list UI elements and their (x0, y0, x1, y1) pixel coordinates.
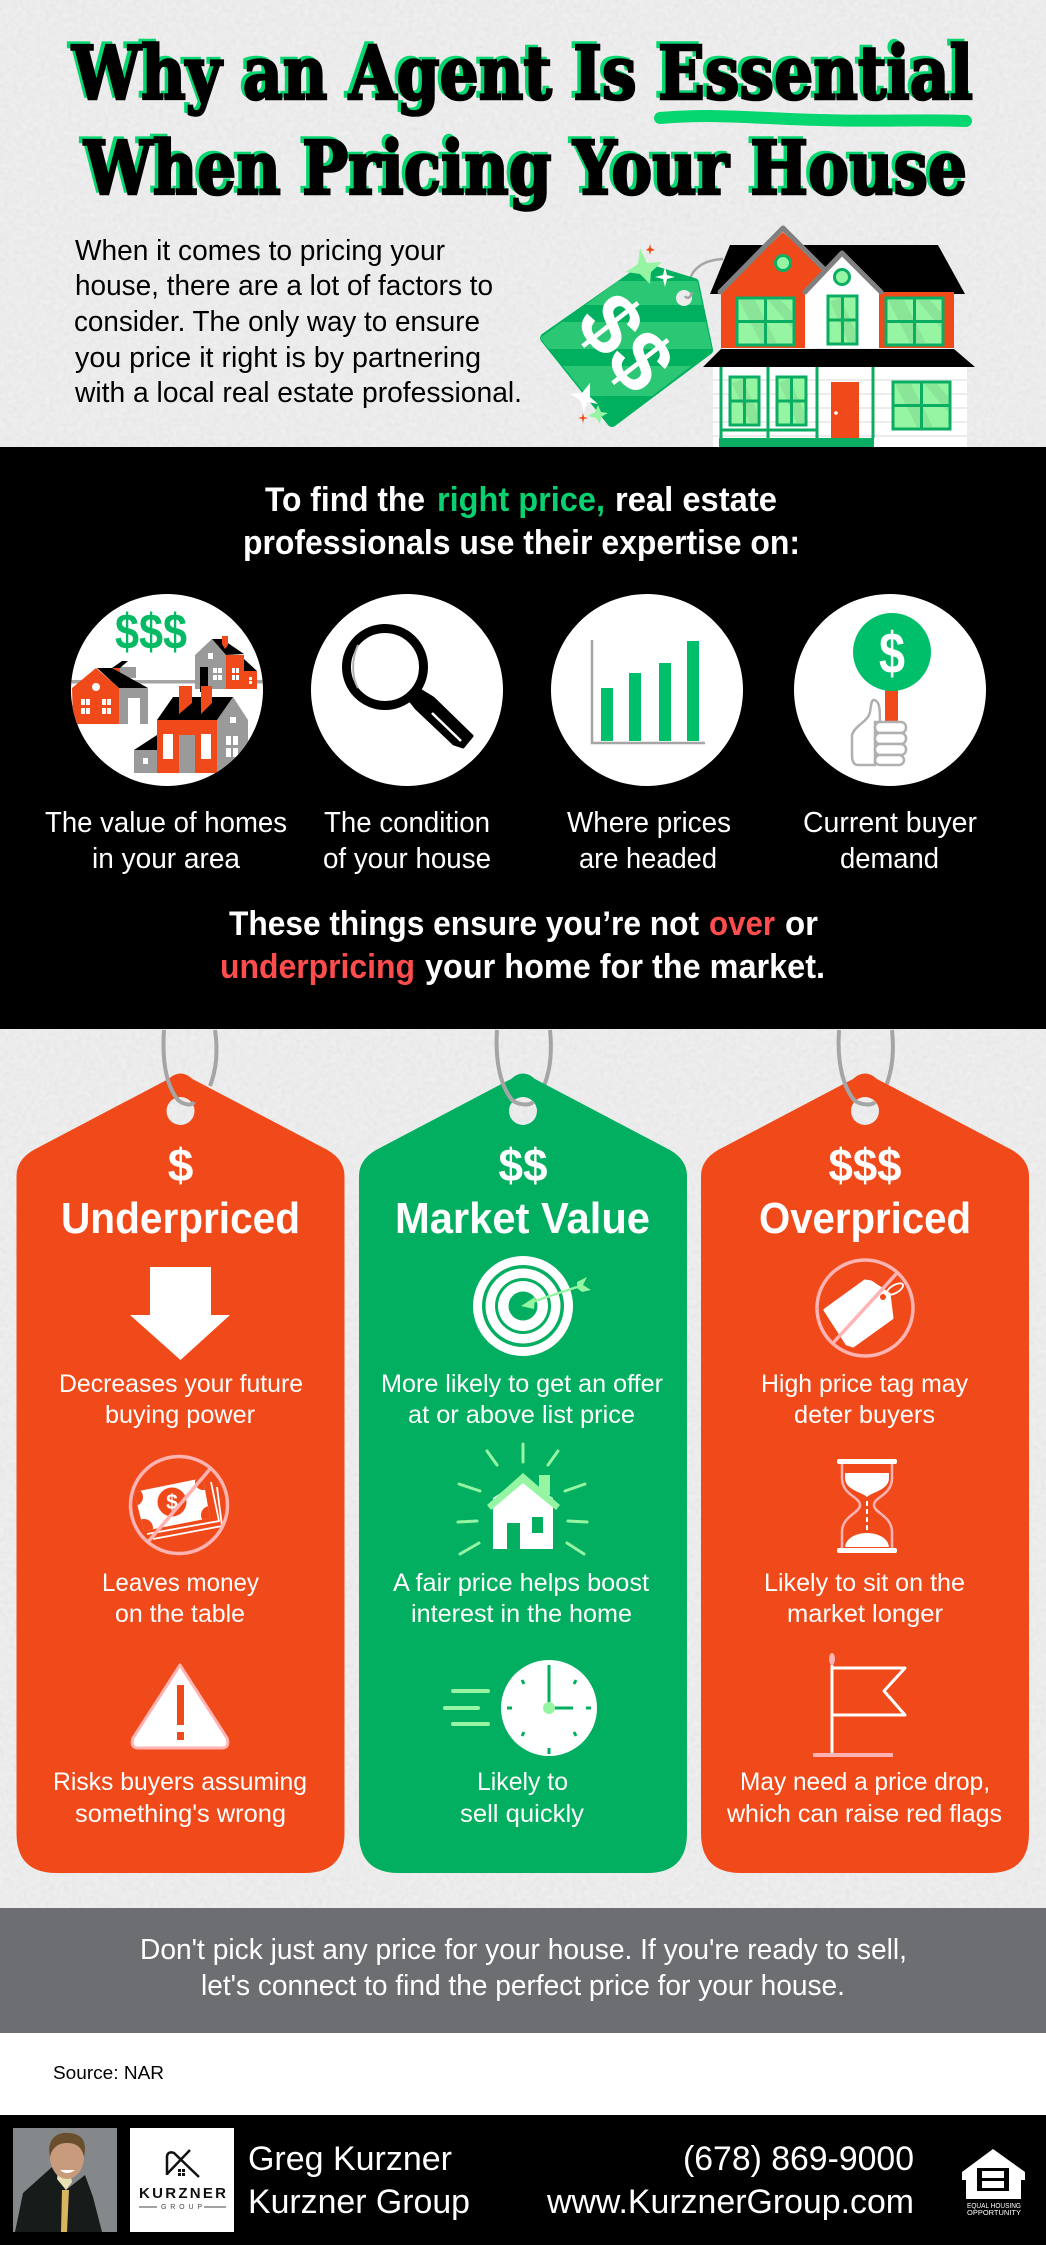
callout: over or underpricing: underpricing (220, 948, 415, 986)
title (68, 28, 973, 212)
text: price drop: May need a price drop, (740, 1768, 990, 1796)
text: future buying power: Decreases your future (59, 1370, 303, 1398)
icon: equal housing opportunity (962, 2149, 1025, 2217)
label: where prices are headed (567, 807, 731, 875)
icon: hourglass (837, 1459, 897, 1553)
text: future buying power (59, 1370, 303, 1429)
callout: over or underpricing: your home for the market. (425, 948, 825, 986)
text: price drop (726, 1768, 1002, 1828)
icon: crossed-out money: $ (166, 1491, 178, 1514)
agent name: Greg Kurzner (248, 2140, 452, 2178)
text: future buying power: buying power (105, 1401, 255, 1429)
call to action band (0, 1908, 1046, 2033)
label: condition (323, 807, 491, 875)
icon: down arrow (130, 1267, 230, 1360)
heading: right price: real estate (615, 481, 777, 519)
panel: overpriced tag (701, 1030, 1029, 1873)
call to action band: let's connect to find the perfect price for your house. (201, 1970, 845, 2002)
heading: overpriced: $$$ (828, 1139, 902, 1191)
intro paragraph: consider. The only way to ensure (74, 306, 480, 338)
intro paragraph: When it comes to pricing your (75, 235, 445, 267)
text: risks: something's wrong (75, 1800, 286, 1828)
icon: equal housing opportunity: OPPORTUNITY (967, 2210, 1021, 2217)
source note: Source: NAR (53, 2063, 164, 2083)
text: price drop: which can raise red flags (726, 1800, 1002, 1828)
icon: magnifying glass (311, 594, 503, 786)
label: value of homes (45, 807, 287, 875)
icon: crossed-out price tag (817, 1260, 913, 1356)
callout: over or underpricing (220, 905, 825, 986)
label: where prices are headed: are headed (579, 843, 717, 875)
panel: black expertise section (0, 447, 1046, 1029)
label: value of homes: in your area (92, 843, 241, 875)
icon: equal housing opportunity: EQUAL HOUSING (967, 2203, 1021, 2210)
contact details (546, 2140, 914, 2221)
intro paragraph: with a local real estate professional. (74, 377, 522, 409)
label: value of homes: The value of homes (45, 807, 287, 839)
agent photo (13, 2128, 117, 2232)
icon: warning triangle (132, 1665, 228, 1748)
intro paragraph: house, there are a lot of factors to (75, 270, 493, 302)
panel: underpriced tag (16, 1030, 344, 1873)
callout: over or underpricing: These things ensure you’re not (229, 905, 699, 943)
icon: crossed-out money (125, 1456, 228, 1554)
icon: flag (813, 1653, 905, 1757)
heading: market value: Market Value (395, 1194, 650, 1243)
call to action band: Don't pick just any price for your house. If you're ready to sell, (140, 1934, 907, 1966)
heading: right price: To find the (265, 481, 425, 519)
icon: house (703, 228, 975, 447)
text: fair price (393, 1569, 649, 1628)
text: high price tag (761, 1370, 968, 1429)
panel: market value tag (359, 1030, 687, 1873)
heading: market value: $$ (498, 1139, 548, 1191)
icon: bar chart (551, 594, 743, 786)
icon: buyer demand sign: $ (879, 621, 905, 686)
intro paragraph (74, 235, 522, 409)
text: offer (381, 1370, 663, 1429)
icon: value of homes: $$$ (115, 604, 187, 660)
icon: buyer demand sign (794, 594, 986, 786)
text: high price tag: High price tag may (761, 1370, 968, 1398)
icon: value of homes (71, 594, 263, 786)
icon: green price tag: $ (588, 313, 693, 410)
company logo: KURZNER (139, 2185, 226, 2202)
heading: right price: professionals use their expertise on: (243, 524, 800, 562)
icon: target with arrow (473, 1256, 591, 1356)
icon: house with rays (458, 1444, 587, 1554)
label: condition: of your house (323, 843, 491, 875)
text: sell quickly: sell quickly (460, 1800, 585, 1828)
label: buyer demand: Current buyer (803, 807, 977, 839)
text: sit on market: Likely to sit on the (764, 1569, 965, 1597)
text: leaves money: Leaves money (102, 1569, 259, 1597)
label: buyer demand (803, 807, 977, 875)
heading: right price (243, 481, 800, 562)
text: risks (53, 1768, 307, 1828)
contact details: (678) 869-9000 (683, 2140, 914, 2178)
heading: overpriced (759, 1139, 971, 1243)
text: offer: at or above list price (408, 1401, 635, 1429)
text: risks: Risks buyers assuming (53, 1768, 307, 1796)
text: offer: More likely to get an offer (381, 1370, 663, 1398)
heading: overpriced: Overpriced (759, 1194, 971, 1243)
footer (0, 2115, 1046, 2245)
company logo: GROUP (161, 2204, 202, 2211)
label: condition: The condition (324, 807, 490, 839)
text: fair price: A fair price helps boost (393, 1569, 649, 1597)
callout: over or underpricing: over (709, 905, 775, 943)
company logo (130, 2128, 234, 2232)
intro paragraph: you price it right is by partnering (75, 342, 481, 374)
title underline (660, 116, 966, 121)
text: sell quickly: Likely to (477, 1768, 568, 1796)
heading: right price: right price, (437, 481, 605, 519)
text: high price tag: deter buyers (794, 1401, 935, 1429)
text: leaves money (102, 1569, 259, 1628)
callout: over or underpricing: or (785, 905, 818, 943)
icon: green price tag (530, 244, 723, 424)
text: leaves money: on the table (115, 1600, 245, 1628)
text: sell quickly (460, 1768, 585, 1828)
text: sit on market: market longer (787, 1600, 943, 1628)
text: sit on market (764, 1569, 965, 1628)
heading: underpriced: Underpriced (61, 1194, 300, 1243)
icon: clock with speed lines (445, 1660, 597, 1756)
heading: underpriced: $ (168, 1139, 193, 1191)
agent name: Kurzner Group (248, 2183, 470, 2221)
label: buyer demand: demand (840, 843, 939, 875)
source note (0, 2033, 1046, 2115)
heading: market value (395, 1139, 650, 1243)
contact details: www.KurznerGroup.com (546, 2183, 914, 2221)
icon: green price tag: $ (558, 276, 663, 373)
heading: underpriced (61, 1139, 300, 1243)
text: fair price: interest in the home (411, 1600, 632, 1628)
label: where prices are headed: Where prices (567, 807, 731, 839)
agent name (248, 2140, 470, 2221)
